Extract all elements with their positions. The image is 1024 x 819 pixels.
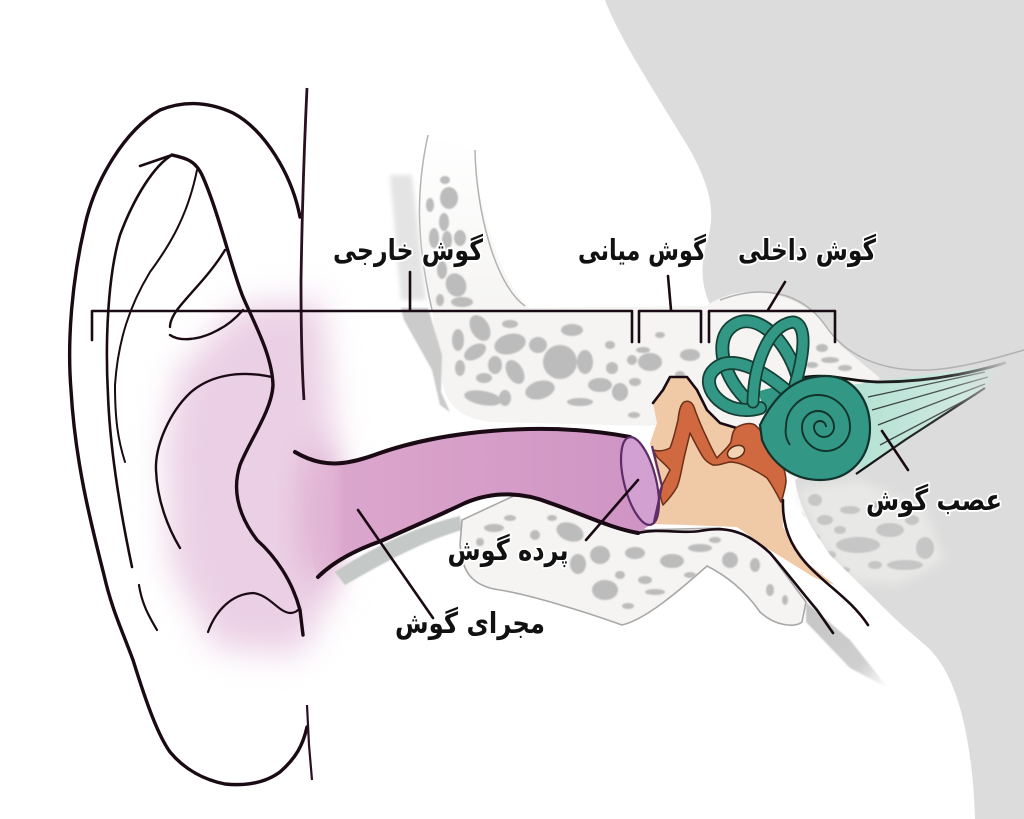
- antihelix branch upper: [170, 250, 225, 327]
- face line upper: [301, 88, 307, 400]
- antihelix branch lower: [170, 310, 243, 339]
- face line lower: [307, 705, 312, 780]
- ossicles: [653, 401, 786, 505]
- middle ear tan tissue: [638, 377, 868, 633]
- auditory nerve: [800, 363, 1005, 474]
- background: grey head tissue: [605, 0, 1024, 819]
- lobe curve: [208, 593, 298, 632]
- brackets and leader lines: [92, 272, 908, 618]
- eardrum: [614, 433, 666, 529]
- helix: [70, 104, 307, 785]
- grey muscle strip: [335, 175, 888, 688]
- concha thick line: [172, 155, 303, 635]
- label: inner ear: گوش داخلی: [738, 233, 876, 267]
- bone cavities: [426, 176, 852, 609]
- label: ear canal: مجرای گوش: [395, 606, 545, 640]
- label: eardrum: پرده گوش: [448, 533, 568, 568]
- antihelix outer line: [107, 155, 172, 567]
- concha curve: [156, 374, 272, 548]
- outer ear outline: [70, 88, 312, 785]
- label: middle ear: گوش میانی: [578, 233, 706, 267]
- semicircular canals: [709, 321, 803, 412]
- lower right spongy bone: [795, 480, 945, 585]
- label: outer ear: گوش خارجی: [333, 233, 483, 267]
- bone outline upper: [419, 135, 1024, 370]
- pink glow around the ear: [165, 300, 338, 655]
- upper temporal bone: [419, 135, 1024, 480]
- ear canal: [295, 429, 650, 577]
- lower bone: [460, 493, 806, 625]
- white gap below the bone: [783, 505, 925, 648]
- antihelix inner line: [115, 170, 197, 462]
- short dash on the helix rim: [139, 585, 157, 630]
- cochlea: [760, 376, 870, 480]
